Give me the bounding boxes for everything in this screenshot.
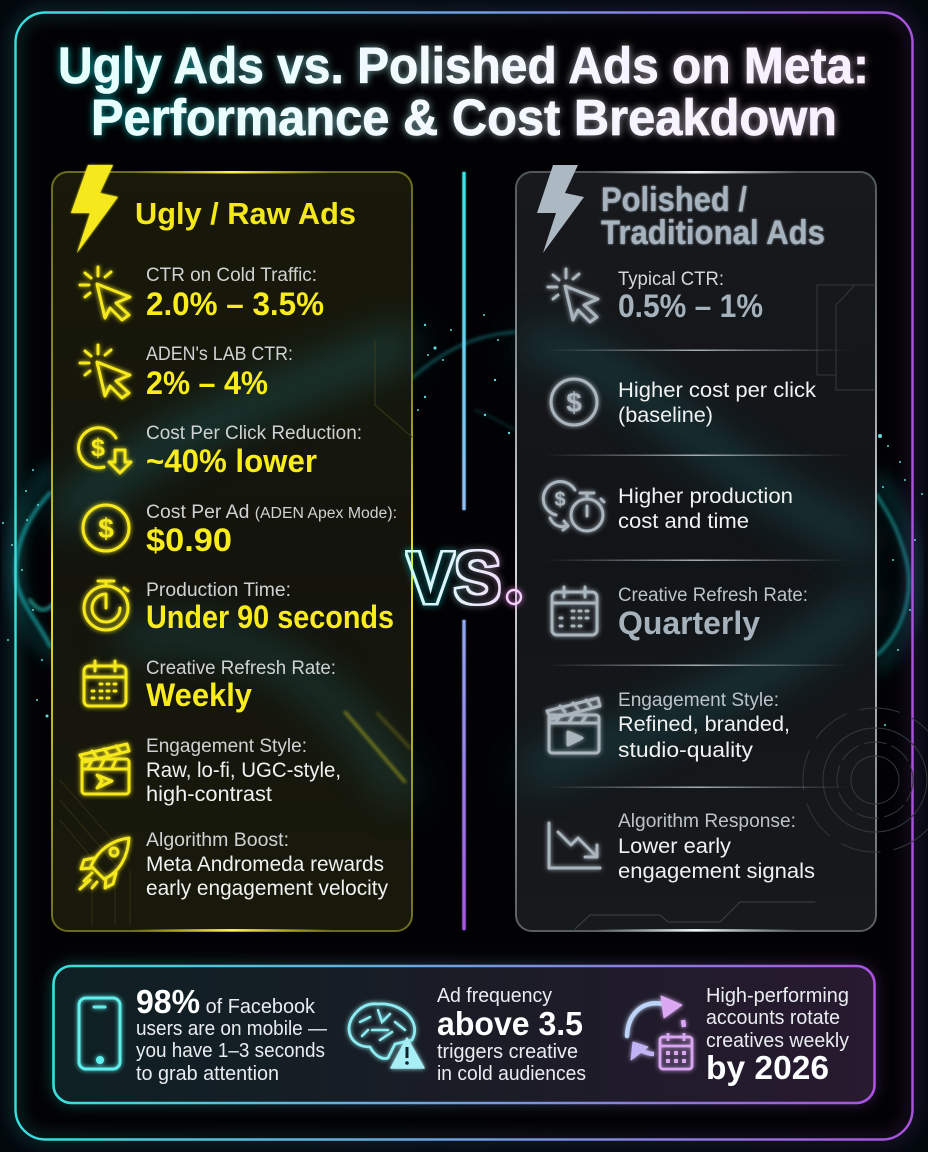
title xyxy=(58,37,869,146)
title: Ugly Ads vs. Polished Ads on Meta: xyxy=(58,37,869,94)
icon: dollar down: $ xyxy=(91,434,105,462)
icon: lightning bolt xyxy=(537,165,584,253)
icon: clapperboard xyxy=(547,698,600,753)
icon: brain with warning xyxy=(349,1004,424,1068)
metric: algorithm response: Lower early xyxy=(618,835,732,858)
metric: engagement style: Refined, branded, xyxy=(618,713,790,736)
stat: ad frequency: Ad frequency xyxy=(437,984,553,1007)
metric: ctr on cold traffic xyxy=(146,265,324,322)
stat: ad frequency: in cold audiences xyxy=(437,1062,586,1085)
panel: polished traditional ads xyxy=(516,165,928,932)
metric: algorithm boost xyxy=(146,830,388,900)
metric: cost per click reduction: Cost Per Click Reduction: xyxy=(146,423,362,444)
metric: engagement style: Engagement Style: xyxy=(618,690,779,711)
icon: cursor click xyxy=(548,269,598,322)
metric: algorithm response xyxy=(618,811,815,883)
icon: stopwatch xyxy=(84,581,128,630)
heading: polished traditional ads: Traditional Ads xyxy=(601,214,825,252)
metric: higher production cost: Higher production xyxy=(618,485,793,508)
metric: creative refresh rate: Quarterly xyxy=(618,605,760,641)
stat: mobile users: users are on mobile — xyxy=(136,1017,327,1040)
metric: ctr on cold traffic: 2.0% – 3.5% xyxy=(146,286,324,322)
metric: cost per click reduction xyxy=(146,423,362,479)
stat: rotate creatives xyxy=(706,984,850,1086)
icon: lightning bolt xyxy=(71,165,118,253)
metric: production time: Production Time: xyxy=(146,580,291,601)
metric: engagement style xyxy=(618,690,790,762)
metric: creative refresh rate: Weekly xyxy=(146,677,252,713)
stat: rotate creatives: by 2026 xyxy=(706,1049,829,1086)
star particles xyxy=(2,314,923,726)
metric: cost per ad: $0.90 xyxy=(146,522,232,558)
stat: rotate creatives: creatives weekly xyxy=(706,1029,850,1052)
icon: calendar xyxy=(84,661,126,706)
metric: engagement style: Engagement Style: xyxy=(146,736,307,757)
metric: aden lab ctr: ADEN's LAB CTR: xyxy=(146,344,293,365)
metric: aden lab ctr xyxy=(146,344,293,401)
heading: polished traditional ads xyxy=(601,181,825,252)
metric: engagement style: high-contrast xyxy=(146,783,272,806)
icon: dollar down xyxy=(79,428,131,473)
stat: ad frequency: triggers creative xyxy=(437,1040,578,1063)
icon: dollar coin xyxy=(83,505,129,551)
metric: algorithm boost: early engagement velocity xyxy=(146,877,388,900)
metric: algorithm response: engagement signals xyxy=(618,860,815,883)
metric: cost per ad: Cost Per Ad (ADEN Apex Mode): xyxy=(146,502,397,523)
icon: dollar coin xyxy=(551,379,597,425)
icon: cost and stopwatch xyxy=(543,482,604,531)
metric: aden lab ctr: 2% – 4% xyxy=(146,365,268,401)
metric: higher production cost: cost and time xyxy=(618,510,749,533)
metric: ctr on cold traffic: CTR on Cold Traffic: xyxy=(146,265,317,286)
heading: ugly raw ads: Ugly / Raw Ads xyxy=(135,196,356,231)
icon: cursor click xyxy=(80,267,130,320)
metric: creative refresh rate: Creative Refresh Rate: xyxy=(618,585,808,606)
icon: dollar coin: $ xyxy=(98,513,114,544)
metric: algorithm boost: Algorithm Boost: xyxy=(146,830,289,851)
center divider line xyxy=(462,172,466,930)
metric: higher cost per click xyxy=(618,379,817,427)
metric: engagement style: Raw, lo-fi, UGC-style, xyxy=(146,759,341,782)
icon: calendar xyxy=(552,587,597,635)
metric: algorithm response: Algorithm Response: xyxy=(618,811,796,832)
icon: dollar coin: $ xyxy=(566,387,582,418)
metric: typical ctr: 0.5% – 1% xyxy=(618,288,763,324)
metric: creative refresh rate: Creative Refresh Rate: xyxy=(146,658,336,679)
icon: cost and stopwatch: $ xyxy=(554,489,566,511)
metric: creative refresh rate xyxy=(146,658,336,713)
metric: engagement style: studio-quality xyxy=(618,739,754,762)
metric: higher cost per click: (baseline) xyxy=(618,404,713,427)
vs badge: VS xyxy=(407,538,501,619)
metric: engagement style xyxy=(146,736,341,806)
icon: phone xyxy=(79,998,120,1069)
metric: typical ctr: Typical CTR: xyxy=(618,269,724,290)
stat: ad frequency xyxy=(437,984,586,1085)
metric: algorithm boost: Meta Andromeda rewards xyxy=(146,853,384,876)
metric: cost per click reduction: ~40% lower xyxy=(146,443,317,479)
icon: cursor click xyxy=(80,345,130,398)
stat: mobile users xyxy=(136,983,327,1085)
panel: bottom stats xyxy=(54,966,874,1103)
icon: declining chart xyxy=(549,823,600,868)
metric: higher production cost xyxy=(618,485,793,533)
metric: higher cost per click: Higher cost per click xyxy=(618,379,817,402)
metric: typical ctr xyxy=(618,269,763,324)
stat: rotate creatives: accounts rotate xyxy=(706,1006,840,1029)
icon: rocket xyxy=(80,838,129,889)
stat: rotate creatives: High-performing xyxy=(706,984,849,1007)
metric: production time: Under 90 seconds xyxy=(146,599,394,635)
stat: mobile users: to grab attention xyxy=(136,1062,279,1085)
metric: cost per ad xyxy=(146,502,397,558)
stat: mobile users: 98% of Facebook xyxy=(136,983,316,1020)
metric: creative refresh rate xyxy=(618,585,808,641)
title: Performance & Cost Breakdown xyxy=(91,89,837,146)
stat: ad frequency: above 3.5 xyxy=(437,1005,583,1042)
heading: polished traditional ads: Polished / xyxy=(601,181,747,219)
stat: mobile users: you have 1–3 seconds xyxy=(136,1039,325,1062)
icon: rotate calendar xyxy=(627,996,692,1069)
metric: production time xyxy=(146,580,394,635)
panel: ugly raw ads xyxy=(52,165,412,932)
icon: clapperboard xyxy=(80,744,129,794)
background nebula swirl xyxy=(14,332,914,665)
